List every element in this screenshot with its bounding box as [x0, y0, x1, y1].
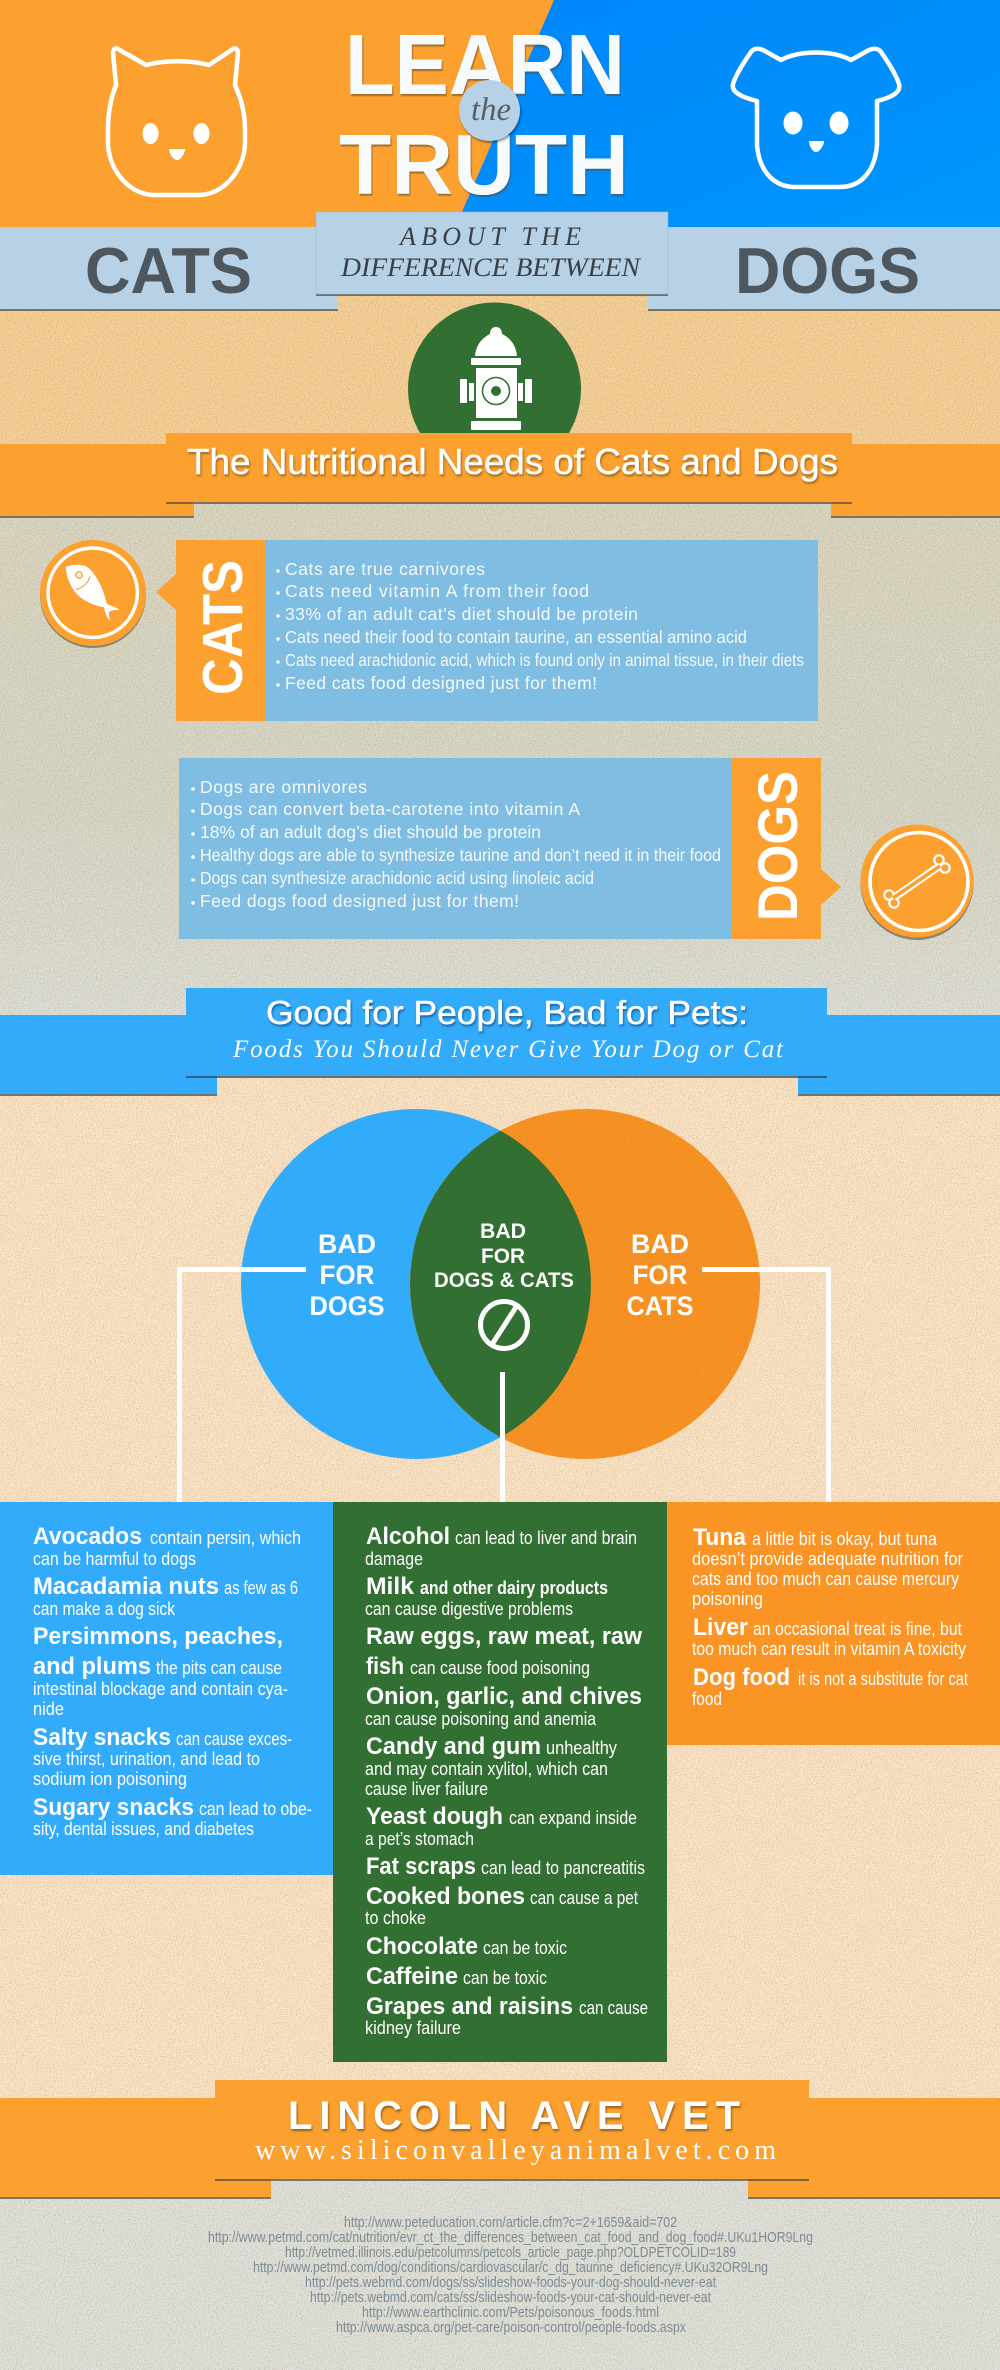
banner: the nutritional needs of cats and dogs: The Nutritional Needs of Cats and Dogs	[187, 441, 838, 482]
caffeine	[366, 1963, 547, 1990]
caffeine: can be toxic	[463, 1968, 547, 1988]
macadamia nuts: can make a dog sick	[33, 1599, 176, 1619]
subtitle panel: about the difference between: DIFFERENCE BETWEEN	[340, 253, 642, 282]
salty snacks: can cause exces-	[176, 1729, 292, 1749]
alcohol	[365, 1523, 637, 1569]
fat scraps: Fat scraps	[366, 1853, 476, 1880]
cats list: Cats need their food to contain taurine, an essential amino acid	[285, 627, 747, 647]
subtitle panel: about the difference between: ABOUT THE	[398, 222, 581, 251]
cats list: Feed cats food designed just for them!	[285, 673, 597, 693]
connector lines	[177, 1267, 831, 1502]
raw eggs: fish	[366, 1653, 404, 1680]
dog food: food	[692, 1689, 722, 1709]
references: http://www.peteducation.com/article.cfm?c=2+1659&aid=702	[344, 2214, 677, 2231]
candy and gum: unhealthy	[546, 1738, 617, 1758]
sugary snacks	[33, 1794, 312, 1839]
sugary snacks: sity, dental issues, and diabetes	[33, 1819, 254, 1839]
label: bad for cats: BAD	[631, 1229, 689, 1259]
avocados: contain persin, which	[150, 1528, 301, 1548]
label: bad for cats	[626, 1229, 694, 1321]
banner: lincoln ave vet: www.siliconvalleyanimalvet.com	[255, 2135, 776, 2166]
alcohol: Alcohol	[366, 1523, 450, 1550]
arrow: dogs pointer	[821, 869, 841, 905]
references: http://vetmed.illinois.edu/petcolumns/petcols_article_page.php?OLDPETCOLID=189	[285, 2244, 736, 2261]
macadamia nuts	[33, 1573, 298, 1619]
macadamia nuts: Macadamia nuts	[33, 1573, 219, 1600]
panel: cats nutrition: CATS	[191, 560, 255, 695]
dogs list	[191, 777, 721, 911]
tuna: a little bit is okay, but tuna	[752, 1529, 938, 1549]
band: cats and dogs label strip: DOGS	[735, 234, 920, 307]
icon: bone badge	[860, 824, 974, 940]
subtitle panel: about the difference between	[316, 212, 668, 296]
salty snacks	[33, 1724, 292, 1789]
salty snacks: Salty snacks	[33, 1724, 171, 1751]
grapes and raisins: Grapes and raisins	[366, 1993, 573, 2020]
label: bad for dogs: DOGS	[310, 1291, 384, 1321]
venn diagram	[241, 1109, 760, 1459]
onion, garlic, chives: can cause poisoning and anemia	[365, 1709, 597, 1729]
band: cats and dogs label strip	[0, 227, 1000, 311]
chocolate: Chocolate	[366, 1933, 478, 1960]
sugary snacks: can lead to obe-	[199, 1799, 312, 1819]
cats list: Cats are true carnivores	[285, 559, 485, 579]
yeast dough: Yeast dough	[366, 1803, 503, 1830]
persimmons, peaches, plums	[33, 1623, 288, 1719]
liver: Liver	[693, 1614, 748, 1641]
persimmons, peaches, plums: Persimmons, peaches,	[33, 1623, 283, 1650]
references: http://www.aspca.org/pet-care/poison-control/people-foods.aspx	[336, 2319, 686, 2336]
title: learn the truth: TRUTH	[339, 118, 629, 213]
dogs list: Dogs are omnivores	[200, 777, 367, 797]
yeast dough: a pet’s stomach	[365, 1829, 474, 1849]
references	[208, 2214, 813, 2336]
grapes and raisins: kidney failure	[365, 2018, 461, 2038]
dogs list: Feed dogs food designed just for them!	[200, 891, 519, 911]
milk	[365, 1573, 608, 1619]
panel: bad for cats list	[667, 1502, 1000, 1745]
title: learn the truth	[339, 18, 629, 213]
cooked bones	[365, 1883, 638, 1928]
cats list	[276, 559, 804, 693]
avocados	[33, 1523, 301, 1569]
milk: and other dairy products	[420, 1578, 608, 1598]
fat scraps	[366, 1853, 645, 1880]
onion, garlic, chives	[365, 1683, 642, 1729]
candy and gum	[365, 1733, 617, 1799]
candy and gum: Candy and gum	[366, 1733, 541, 1760]
tuna: doesn’t provide adequate nutrition for	[692, 1549, 963, 1569]
label: bad for dogs and cats: FOR	[481, 1245, 525, 1268]
avocados: can be harmful to dogs	[33, 1549, 196, 1569]
venn: bad for dogs circle	[241, 1109, 591, 1459]
label: bad for dogs and cats	[434, 1220, 574, 1292]
label: bad for dogs and cats: DOGS & CATS	[434, 1269, 574, 1292]
venn: overlap	[410, 1131, 591, 1437]
panel: dogs nutrition	[179, 758, 841, 939]
grapes and raisins	[365, 1993, 648, 2038]
icon: cat face	[108, 48, 245, 195]
venn: bad for cats circle	[410, 1109, 760, 1459]
title: learn the truth: the	[471, 92, 511, 128]
arrow: cats pointer	[156, 574, 176, 610]
tuna: cats and too much can cause mercury	[692, 1569, 959, 1589]
avocados: Avocados	[33, 1523, 142, 1550]
raw eggs	[366, 1623, 642, 1680]
header: orange and blue split	[0, 0, 1000, 228]
liver: too much can result in vitamin A toxicity	[692, 1639, 966, 1659]
chocolate: can be toxic	[483, 1938, 567, 1958]
cooked bones: can cause a pet	[530, 1888, 638, 1908]
band: cats and dogs label strip: CATS	[85, 234, 252, 307]
label: bad for dogs: FOR	[320, 1260, 374, 1290]
raw eggs: can cause food poisoning	[410, 1658, 590, 1678]
banner: good for people, bad for pets: Good for People, Bad for Pets:	[266, 994, 748, 1031]
icon: no symbol	[480, 1302, 528, 1348]
banner: lincoln ave vet: LINCOLN AVE VET	[288, 2094, 740, 2138]
label: bad for cats: FOR	[632, 1260, 688, 1290]
alcohol: damage	[365, 1549, 423, 1569]
cooked bones: Cooked bones	[366, 1883, 525, 1910]
panel: bad for dogs and cats list	[333, 1502, 667, 2062]
title: learn the truth: LEARN	[345, 18, 625, 113]
cats list: Cats need vitamin A from their food	[285, 581, 589, 601]
grapes and raisins: can cause	[579, 1998, 648, 2018]
tuna: poisoning	[692, 1589, 763, 1609]
references: http://www.petmd.com/dog/conditions/cardiovascular/c_dg_taurine_deficiency#.UKu32OR9Lng	[253, 2259, 768, 2276]
icon: fire hydrant	[408, 302, 581, 476]
chocolate	[366, 1933, 567, 1960]
icon: dog face	[733, 49, 899, 187]
label: bad for dogs	[310, 1229, 384, 1321]
candy and gum: cause liver failure	[365, 1779, 488, 1799]
banner: lincoln ave vet	[0, 2080, 1000, 2199]
liver: an occasional treat is fine, but	[753, 1619, 962, 1639]
cooked bones: to choke	[365, 1908, 426, 1928]
persimmons, peaches, plums: and plums	[33, 1653, 151, 1680]
banner: good for people, bad for pets: Foods You Should Never Give Your Dog or Cat	[232, 1036, 784, 1063]
alcohol: can lead to liver and brain	[455, 1528, 637, 1548]
tuna	[692, 1524, 963, 1609]
yeast dough	[365, 1803, 637, 1849]
dogs list: Dogs can convert beta-carotene into vitamin A	[200, 799, 580, 819]
dog food	[692, 1664, 968, 1709]
liver	[692, 1614, 966, 1659]
macadamia nuts: as few as 6	[224, 1578, 298, 1598]
label: bad for dogs: BAD	[318, 1229, 376, 1259]
cats list: 33% of an adult cat’s diet should be protein	[285, 604, 638, 624]
dogs list: Healthy dogs are able to synthesize taurine and don’t need it in their food	[200, 845, 721, 865]
salty snacks: sive thirst, urination, and lead to	[33, 1749, 260, 1769]
candy and gum: and may contain xylitol, which can	[365, 1759, 608, 1779]
raw eggs: Raw eggs, raw meat, raw	[366, 1623, 642, 1650]
icon: fish badge	[40, 540, 146, 648]
sugary snacks: Sugary snacks	[33, 1794, 194, 1821]
salty snacks: sodium ion poisoning	[33, 1769, 187, 1789]
onion, garlic, chives: Onion, garlic, and chives	[366, 1683, 642, 1710]
persimmons, peaches, plums: intestinal blockage and contain cya-	[33, 1679, 288, 1699]
milk: can cause digestive problems	[365, 1599, 573, 1619]
panel: bad for dogs list	[0, 1502, 333, 1875]
label: bad for dogs and cats: BAD	[480, 1220, 526, 1243]
banner: good for people, bad for pets	[0, 988, 1000, 1096]
panel: dogs nutrition: DOGS	[746, 771, 809, 921]
yeast dough: can expand inside	[509, 1808, 637, 1828]
banner: the nutritional needs of cats and dogs	[0, 433, 1000, 518]
persimmons, peaches, plums: nide	[33, 1699, 64, 1719]
panel: cats nutrition	[156, 540, 818, 721]
fat scraps: can lead to pancreatitis	[481, 1858, 645, 1878]
references: http://www.petmd.com/cat/nutrition/evr_ct_the_differences_between_cat_food_and_dog_food#.UKu1HOR9Lng	[208, 2229, 813, 2246]
caffeine: Caffeine	[366, 1963, 458, 1990]
dog food: Dog food	[693, 1664, 790, 1691]
references: http://pets.webmd.com/dogs/ss/slideshow-foods-your-dog-should-never-eat	[305, 2274, 717, 2291]
dogs list: 18% of an adult dog’s diet should be protein	[200, 822, 541, 842]
cats list: Cats need arachidonic acid, which is found only in animal tissue, in their diets	[285, 650, 804, 670]
dogs list: Dogs can synthesize arachidonic acid using linoleic acid	[200, 868, 594, 888]
milk: Milk	[366, 1573, 415, 1600]
references: http://pets.webmd.com/cats/ss/slideshow-foods-your-cat-should-never-eat	[310, 2289, 712, 2306]
persimmons, peaches, plums: the pits can cause	[156, 1658, 282, 1678]
references: http://www.earthclinic.com/Pets/poisonous_foods.html	[362, 2304, 659, 2321]
tuna: Tuna	[693, 1524, 747, 1551]
label: bad for cats: CATS	[626, 1291, 694, 1321]
